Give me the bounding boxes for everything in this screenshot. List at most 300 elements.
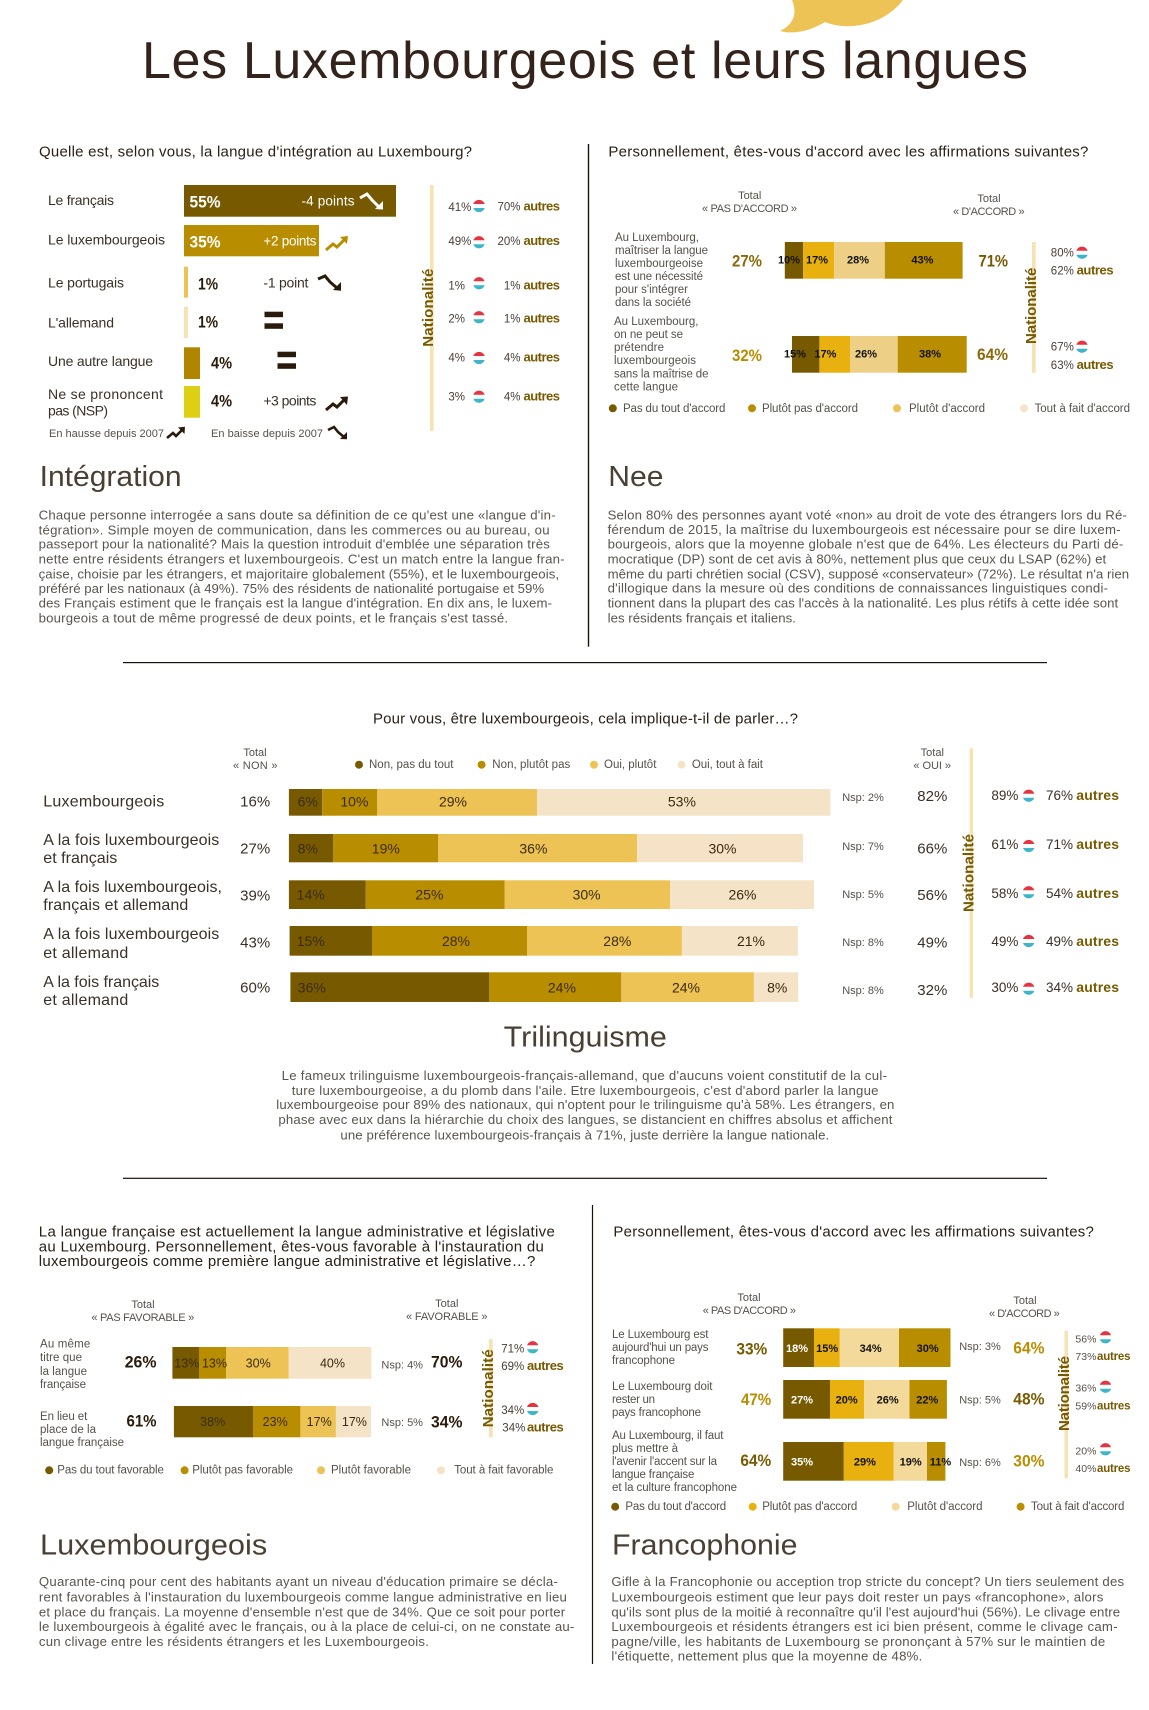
total pas d'accord header xyxy=(703,1292,796,1317)
total d'accord header: Total xyxy=(977,193,1001,205)
legend: Tout à fait favorable xyxy=(454,1465,553,1477)
row: le français: Le français xyxy=(48,192,114,208)
nationality column: 56% xyxy=(1075,1333,1096,1345)
body text: les résidents français et italiens. xyxy=(608,610,796,625)
statement 1 xyxy=(612,1329,709,1367)
stacked bar 1: 43% xyxy=(911,255,934,267)
stacked bar 3: 30% xyxy=(1013,1452,1044,1471)
row: français et allemand: 32% xyxy=(917,982,947,999)
body text: qu'ils sont plus de la moitié à reconnaître qu'il l'est aujourd'hui (56%). Le clivage entre xyxy=(611,1605,1120,1620)
statement 1: Au Luxembourg, xyxy=(615,232,699,244)
stacked bar 1: Nsp: 3% xyxy=(959,1341,1001,1353)
legend: Plutôt pas d'accord xyxy=(762,403,858,415)
row 2: 49% xyxy=(448,236,471,248)
stacked bar 2: 48% xyxy=(1013,1389,1044,1408)
row: luxembourgeois et français: et français xyxy=(43,850,117,867)
statement 1: française xyxy=(40,1379,86,1391)
legend: Pas du tout favorable xyxy=(57,1465,164,1477)
stacked bar 1: 30% xyxy=(917,1343,939,1355)
statement 1: la langue xyxy=(40,1366,87,1378)
row: ne se prononcent pas: 4% xyxy=(211,392,232,411)
nationality column xyxy=(1056,1331,1130,1478)
body text: phase avec eux dans la hiérarchie du choix des langues, se distancient en chiffres absolus et affichent xyxy=(278,1112,893,1127)
stacked bar 1 xyxy=(736,1328,1044,1367)
nationality column: autres xyxy=(1076,979,1119,995)
row: luxembourgeois, français et allemand: français et allemand xyxy=(43,897,188,914)
nationality column xyxy=(480,1339,564,1437)
row: français et allemand: 8% xyxy=(767,980,787,996)
panel: être luxembourgeois xyxy=(43,710,1119,1009)
statement 2: langue française xyxy=(40,1437,124,1449)
article: Nee xyxy=(608,461,1129,625)
stacked bar 2 xyxy=(732,336,1008,373)
stacked bar 2: 61% xyxy=(126,1412,156,1431)
nationality column: autres xyxy=(1076,787,1119,803)
row 2: 20% xyxy=(497,236,520,248)
stacked bar 2: 34% xyxy=(431,1413,462,1432)
row: français et allemand: et allemand xyxy=(43,992,128,1009)
stacked bar 1: 17% xyxy=(806,255,828,267)
row: luxembourgeois et français: 19% xyxy=(372,840,400,856)
row 4 xyxy=(448,310,560,325)
nationality column: autres xyxy=(1077,357,1114,372)
stacked bar 1: 27% xyxy=(732,252,762,271)
statement 2: luxembourgeois xyxy=(614,355,696,367)
total d'accord header xyxy=(953,193,1025,218)
stacked bar 2: 20% xyxy=(836,1394,858,1406)
statement 1 xyxy=(40,1339,90,1391)
row: luxembourgeois et allemand: 28% xyxy=(442,933,470,949)
statement 3 xyxy=(612,1430,737,1494)
nationality column: autres xyxy=(1097,1351,1130,1363)
total pas favorable header xyxy=(91,1299,194,1324)
body text: cun clivage entre les résidents étrangers et les Luxembourgeois. xyxy=(39,1634,429,1649)
stacked bar 1: 40% xyxy=(320,1356,345,1370)
row: luxembourgeois, français et allemand: 39% xyxy=(240,888,270,905)
heading: Nee xyxy=(608,461,664,493)
row: Luxembourgeois: 6% xyxy=(298,794,318,810)
stacked bar 1: 13% xyxy=(202,1356,227,1370)
legend: hausse et baisse xyxy=(49,427,347,440)
total non header: Total xyxy=(243,747,267,759)
statement 2 xyxy=(40,1411,124,1449)
statement 2: on ne peut se xyxy=(614,329,683,341)
nationality column: 49% xyxy=(1046,934,1073,949)
statement 1: titre que xyxy=(40,1352,82,1364)
body text: passeport pour la nationalité? Mais la question introduit d'emblée une séparation très xyxy=(39,537,550,552)
legend: Plutôt d'accord xyxy=(907,1501,982,1513)
row 5: 4% xyxy=(448,353,465,365)
nationality column xyxy=(1023,242,1114,373)
row: l'allemand xyxy=(48,307,283,338)
total non header: « NON » xyxy=(233,760,278,772)
row 6 xyxy=(448,389,560,404)
row 4: autres xyxy=(524,310,560,325)
legend xyxy=(355,759,764,771)
row: Luxembourgeois: 29% xyxy=(439,794,467,810)
body text: mocratique (DP) sont de cet avis à 80%, nettement plus que ceux du LSAP (62%) et xyxy=(608,551,1107,566)
nationality column: 73% xyxy=(1075,1351,1096,1363)
nationality column: 89% xyxy=(991,788,1018,803)
row 1: 41% xyxy=(448,202,471,214)
body text: Le fameux trilinguisme luxembourgeois-français-allemand, que d'aucuns voient constitutif de la cul- xyxy=(282,1068,887,1083)
row: luxembourgeois, français et allemand: A la fois luxembourgeois, xyxy=(43,879,222,896)
statement 2: rester un xyxy=(612,1394,655,1406)
article: Luxembourgeois xyxy=(39,1529,574,1649)
nationality column: 34% xyxy=(502,1422,525,1434)
row 5 xyxy=(448,350,560,365)
row: le français: 55% xyxy=(190,192,220,211)
row: français et allemand xyxy=(43,972,947,1009)
row 3: 1% xyxy=(448,280,465,292)
statement 1: pour s'intégrer xyxy=(615,284,688,296)
stacked bar 1: 15% xyxy=(816,1343,838,1355)
stacked bar 2: 17% xyxy=(307,1415,332,1429)
nationality column xyxy=(960,748,1119,998)
body text: Luxembourgeois estiment que leur pays doit rester un pays «francophone», alors xyxy=(611,1590,1104,1605)
stacked bar 3: 64% xyxy=(740,1451,771,1470)
total favorable header: « FAVORABLE » xyxy=(406,1311,488,1323)
stacked bar 1: 71% xyxy=(978,252,1008,271)
nationality column: 80% xyxy=(1051,248,1074,260)
nationality column: 54% xyxy=(1046,886,1073,901)
row: luxembourgeois, français et allemand xyxy=(43,879,947,914)
stacked bar 2: Nsp: 5% xyxy=(381,1417,423,1429)
row: Luxembourgeois xyxy=(43,788,947,816)
legend: Non, pas du tout xyxy=(369,759,454,771)
row: français et allemand: A la fois français xyxy=(43,974,159,991)
heading: question intégration: Quelle est, selon vous, la langue d'intégration au Luxembourg? xyxy=(39,144,472,161)
body text: une préférence luxembourgeois-français à 71%, juste derrière la langue nationale. xyxy=(340,1127,829,1142)
row 3 xyxy=(448,277,560,292)
stacked bar 3: 19% xyxy=(900,1456,922,1468)
heading: question: au Luxembourg. Personnellement, êtes-vous favorable à l'instauration du xyxy=(39,1239,544,1256)
row: luxembourgeois, français et allemand: 56% xyxy=(917,887,947,904)
row: une autre langue: Une autre langue xyxy=(48,353,153,369)
stacked bar 1: Nsp: 4% xyxy=(381,1359,423,1371)
row: Luxembourgeois: 82% xyxy=(917,788,947,805)
statement 3: et la culture francophone xyxy=(612,1482,737,1494)
stacked bar 1: 34% xyxy=(860,1343,882,1355)
legend: Non, plutôt pas xyxy=(492,759,571,771)
row: luxembourgeois, français et allemand: 25% xyxy=(415,886,443,902)
nationality column: Nationalité xyxy=(1056,1356,1073,1431)
body text: le luxembourgeois à égalité avec le français, ou à la place de celui-ci, on ne constate au- xyxy=(39,1619,574,1634)
heading: question: La langue française est actuellement la langue administrative et législative xyxy=(39,1224,555,1241)
body text: préféré par les nationaux (à 49%). 75% des résidents de nationalité portugaise et 59% xyxy=(39,581,544,596)
body text: rent favorables à l'instauration du luxembourgeois comme langue administrative en lieu xyxy=(39,1590,567,1605)
nationality column: 76% xyxy=(1046,788,1073,803)
row: luxembourgeois et allemand: et allemand xyxy=(43,945,128,962)
stacked bar 3: 11% xyxy=(930,1456,951,1468)
body text: d'illogique dans la mesure où des conditions de connaissances linguistiques condi- xyxy=(608,581,1108,596)
row: luxembourgeois, français et allemand: 14% xyxy=(297,886,325,902)
total oui header xyxy=(913,747,951,772)
stacked bar 1: 33% xyxy=(736,1339,767,1358)
statement 3: Au Luxembourg, il faut xyxy=(612,1430,724,1442)
stacked bar 1 xyxy=(732,242,1008,279)
statement 1: luxembourgeoise xyxy=(615,258,703,270)
heading: question: Pour vous, être luxembourgeois, cela implique-t-il de parler…? xyxy=(373,710,798,727)
stacked bar 1: 64% xyxy=(1013,1338,1044,1357)
nationality column: autres xyxy=(1076,836,1119,852)
stacked bar 2 xyxy=(741,1380,1044,1419)
legend: hausse et baisse: En baisse depuis 2007 xyxy=(211,428,323,440)
body text: bourgeois, alors que la moyenne globale n'est que de 64%. Les électeurs du Parti dé- xyxy=(608,537,1123,552)
row 3: autres xyxy=(524,277,560,292)
statement 2: En lieu et xyxy=(40,1411,88,1423)
statement 2: Au Luxembourg, xyxy=(614,316,698,328)
row: luxembourgeois et allemand: 43% xyxy=(240,935,270,952)
total d'accord header: « D'ACCORD » xyxy=(953,206,1025,218)
row: luxembourgeois et français: 66% xyxy=(917,840,947,857)
nationality column: 71% xyxy=(1046,837,1073,852)
stacked bar 2: 26% xyxy=(877,1394,899,1406)
statement 1: francophone xyxy=(612,1355,675,1367)
row: luxembourgeois et allemand: 28% xyxy=(603,933,631,949)
panel: affirmations accord xyxy=(608,144,1130,415)
nationality column: autres xyxy=(1076,885,1119,901)
nationality column: 58% xyxy=(991,886,1018,901)
heading: question: luxembourgeois comme première langue administrative et législative…? xyxy=(39,1253,535,1270)
heading: Trilinguisme xyxy=(504,1022,667,1054)
total pas d'accord header: Total xyxy=(738,190,761,202)
body text: tégration». Simple moyen de communication, dans les commerces ou au bureau, ou xyxy=(39,522,550,537)
nationality column: autres xyxy=(1097,1463,1130,1475)
row: une autre langue xyxy=(48,347,296,379)
body text: des Français estiment que le français est la langue d'intégration. En dix ans, le luxem- xyxy=(39,596,552,611)
stacked bar 2: 64% xyxy=(977,345,1008,364)
row: luxembourgeois, français et allemand: 26% xyxy=(728,886,757,902)
nationality column: 34% xyxy=(501,1405,524,1417)
row: le luxembourgeois: +2 points xyxy=(263,233,317,248)
row: français et allemand: 36% xyxy=(298,980,326,996)
row: luxembourgeois et allemand: 15% xyxy=(297,933,325,949)
row: le portugais xyxy=(48,267,341,298)
total pas d'accord header xyxy=(702,190,797,215)
stacked bar 2 xyxy=(126,1406,462,1437)
nationality column: Nationalité xyxy=(960,834,977,912)
stacked bar 1: 18% xyxy=(786,1343,808,1355)
nationality column: 61% xyxy=(991,837,1018,852)
row: luxembourgeois et français: A la fois luxembourgeois xyxy=(43,832,219,849)
stacked bar 3 xyxy=(740,1442,1044,1481)
body text: Gifle à la Francophonie ou acception trop stricte du concept? Un tiers seulement des xyxy=(611,1574,1125,1589)
total pas d'accord header: Total xyxy=(737,1292,761,1304)
legend xyxy=(45,1465,553,1477)
legend: Pas du tout d'accord xyxy=(625,1501,726,1513)
heading: question accord: Personnellement, êtes-vous d'accord avec les affirmations suivantes? xyxy=(608,144,1088,161)
stacked bar 2: 38% xyxy=(200,1415,225,1429)
row: le français xyxy=(48,185,396,217)
nationality column: 67% xyxy=(1051,342,1074,354)
legend: hausse et baisse: En hausse depuis 2007 xyxy=(49,428,164,440)
statement 1: est une nécessité xyxy=(615,271,703,283)
body text: même du parti chrétien social (CSV), supposé «conservateur» (72%). Le résultat n'a rien xyxy=(608,566,1129,581)
stacked bar 1 xyxy=(125,1347,462,1379)
legend: Plutôt favorable xyxy=(331,1465,411,1477)
nationality column: 63% xyxy=(1051,360,1074,372)
row: luxembourgeois et allemand: 21% xyxy=(737,933,765,949)
row: le portugais: Le portugais xyxy=(48,275,124,291)
body text xyxy=(39,1574,574,1649)
row: français et allemand: 60% xyxy=(240,979,270,996)
total pas d'accord header: « PAS D'ACCORD » xyxy=(703,1305,796,1317)
body text: tionnent dans la plupart des cas l'accès à la nationalité. Les plus rétifs à cette idée sont xyxy=(608,596,1119,611)
row 6: 3% xyxy=(448,392,465,404)
row: luxembourgeois et allemand xyxy=(43,926,947,962)
row: luxembourgeois et français: 8% xyxy=(298,840,318,856)
statement 1: aujourd'hui un pays xyxy=(612,1342,709,1354)
row 3: 1% xyxy=(504,280,520,292)
row: ne se prononcent pas xyxy=(48,386,348,419)
row: Luxembourgeois: 53% xyxy=(668,794,696,810)
row: français et allemand: Nsp: 8% xyxy=(842,985,884,997)
panel: langue administrative xyxy=(39,1224,564,1477)
statement 3: langue française xyxy=(612,1469,694,1481)
nationality column: Nationalité xyxy=(420,269,437,347)
body text xyxy=(611,1574,1125,1664)
body text: Luxembourgeois et résidents étrangers est ici bien présent, comme le clivage cam- xyxy=(611,1619,1118,1634)
legend: Plutôt pas d'accord xyxy=(762,1501,857,1513)
row: luxembourgeois et français: 27% xyxy=(240,840,270,857)
statement 1: maîtriser la langue xyxy=(615,245,708,257)
body text: pagne/ville, les habitants de Luxembourg se prononçant à 57% sur le maintien de xyxy=(611,1634,1105,1649)
total favorable header xyxy=(406,1298,488,1323)
statement 2: Le Luxembourg doit xyxy=(612,1381,713,1393)
stacked bar 2: 15% xyxy=(784,349,806,361)
row: luxembourgeois et allemand: A la fois luxembourgeois xyxy=(43,926,219,943)
row: Luxembourgeois: 10% xyxy=(340,794,368,810)
total d'accord header: « D'ACCORD » xyxy=(989,1308,1060,1320)
title: Les Luxembourgeois et leurs langues xyxy=(142,32,1028,90)
stacked bar 2: 23% xyxy=(263,1415,288,1429)
row: l'allemand: 1% xyxy=(198,312,218,331)
statement 2: sans la maîtrise de xyxy=(614,369,708,381)
icon: speech bubble xyxy=(780,0,903,32)
panel: francophonie accord xyxy=(611,1224,1130,1513)
stacked bar 1: 30% xyxy=(246,1356,271,1370)
row 4: 1% xyxy=(504,313,520,325)
legend: Oui, tout à fait xyxy=(692,759,764,771)
statement 2: place de la xyxy=(40,1424,97,1436)
nationality column: 20% xyxy=(1075,1445,1096,1457)
article: Francophonie xyxy=(611,1529,1125,1664)
row: ne se prononcent pas: pas (NSP) xyxy=(48,403,108,419)
row: luxembourgeois et français: 30% xyxy=(708,840,737,856)
row: ne se prononcent pas: Ne se prononcent xyxy=(48,386,163,402)
legend: Oui, plutôt xyxy=(604,759,657,771)
body text: l'étiquette, nettement plus que la moyenne de 48%. xyxy=(611,1649,922,1664)
row: luxembourgeois, français et allemand: Nsp: 5% xyxy=(842,889,884,901)
nationality column: 59% xyxy=(1075,1400,1096,1412)
body text: luxembourgeoise pour 89% des nationaux, qui n'optent pour le trilinguisme qu'à 58%. Les étrangers, en xyxy=(276,1097,894,1112)
legend xyxy=(609,403,1130,415)
row 6: autres xyxy=(524,389,560,404)
row: luxembourgeois et allemand: Nsp: 8% xyxy=(842,937,884,949)
stacked bar 2: 26% xyxy=(855,349,877,361)
legend: Tout à fait d'accord xyxy=(1031,1501,1124,1513)
stacked bar 2: 27% xyxy=(791,1394,813,1406)
nationality column: Nationalité xyxy=(480,1349,497,1427)
nationality column: 49% xyxy=(991,934,1018,949)
total oui header: « OUI » xyxy=(913,760,951,772)
row 4: 2% xyxy=(448,313,465,325)
row 2 xyxy=(448,233,560,248)
nationality column: autres xyxy=(527,1419,564,1434)
row: français et allemand: 24% xyxy=(548,980,576,996)
article: Intégration xyxy=(39,461,565,625)
statement 1 xyxy=(615,232,708,309)
heading: Intégration xyxy=(40,461,182,493)
total pas d'accord header: « PAS D'ACCORD » xyxy=(702,203,797,215)
statement 2: pays francophone xyxy=(612,1407,701,1419)
stacked bar 3: Nsp: 6% xyxy=(959,1457,1001,1469)
total non header xyxy=(233,747,278,772)
heading: Luxembourgeois xyxy=(40,1529,267,1561)
nationality column: Nationalité xyxy=(1023,268,1040,344)
row: luxembourgeois et français xyxy=(43,832,947,867)
statement 1: Le Luxembourg est xyxy=(612,1329,709,1341)
nationality column: 34% xyxy=(1046,980,1073,995)
stacked bar 2: 32% xyxy=(732,346,762,365)
body text xyxy=(39,507,565,625)
row 1: 70% xyxy=(497,201,520,213)
statement 1: Au même xyxy=(40,1339,90,1351)
nationality column: 36% xyxy=(1075,1383,1096,1395)
row: luxembourgeois, français et allemand: 30% xyxy=(573,886,601,902)
body text: bourgeois a tout de même progressé de deux points, et le français s'est tassé. xyxy=(39,610,508,625)
total pas favorable header: Total xyxy=(131,1299,155,1311)
row: le luxembourgeois xyxy=(48,225,348,256)
heading: question xyxy=(39,1224,555,1270)
stacked bar 2: Nsp: 5% xyxy=(959,1394,1001,1406)
row 2: autres xyxy=(524,233,560,248)
row: Luxembourgeois: Nsp: 2% xyxy=(842,792,884,804)
nationality column: autres xyxy=(527,1358,564,1373)
row 1 xyxy=(448,198,560,214)
heading: question: Personnellement, êtes-vous d'accord avec les affirmations suivantes? xyxy=(613,1224,1094,1241)
stacked bar 1: 13% xyxy=(174,1356,199,1370)
total d'accord header: Total xyxy=(1013,1295,1037,1307)
row 6: 4% xyxy=(504,392,520,404)
body text xyxy=(608,507,1129,625)
row: français et allemand: 24% xyxy=(672,980,700,996)
legend: Pas du tout d'accord xyxy=(623,403,725,415)
body text: çaise, choisie par les étrangers, et majoritaire globalement (55%), et le luxembourgeois, xyxy=(39,566,559,581)
body text: nette entre résidents étrangers et luxembourgeois. C'est un match entre la langue fran- xyxy=(39,551,565,566)
row: le luxembourgeois: Le luxembourgeois xyxy=(48,231,165,247)
body text: Chaque personne interrogée a sans doute sa définition de ce qu'est une «langue d'in- xyxy=(39,507,556,522)
stacked bar 1: 26% xyxy=(125,1353,156,1372)
row: le portugais: -1 point xyxy=(263,275,309,291)
row: ne se prononcent pas: +3 points xyxy=(263,393,316,409)
stacked bar 1: 28% xyxy=(847,255,869,267)
statement 1: dans la société xyxy=(615,297,691,309)
stacked bar 2: 17% xyxy=(342,1415,367,1429)
row: le français: -4 points xyxy=(302,193,355,208)
stacked bar 2: 47% xyxy=(741,1390,771,1409)
nationality column: 69% xyxy=(501,1361,524,1373)
statement 2: prétendre xyxy=(614,342,664,354)
stacked bar 3: 35% xyxy=(791,1456,813,1468)
row: le luxembourgeois: 35% xyxy=(190,232,220,251)
row 5: 4% xyxy=(504,353,520,365)
body text: Selon 80% des personnes ayant voté «non» au droit de vote des étrangers lors du Ré- xyxy=(608,507,1127,522)
nationality column: 30% xyxy=(991,980,1018,995)
total favorable header: Total xyxy=(435,1298,458,1310)
bar chart: langue d'intégration xyxy=(48,185,396,440)
